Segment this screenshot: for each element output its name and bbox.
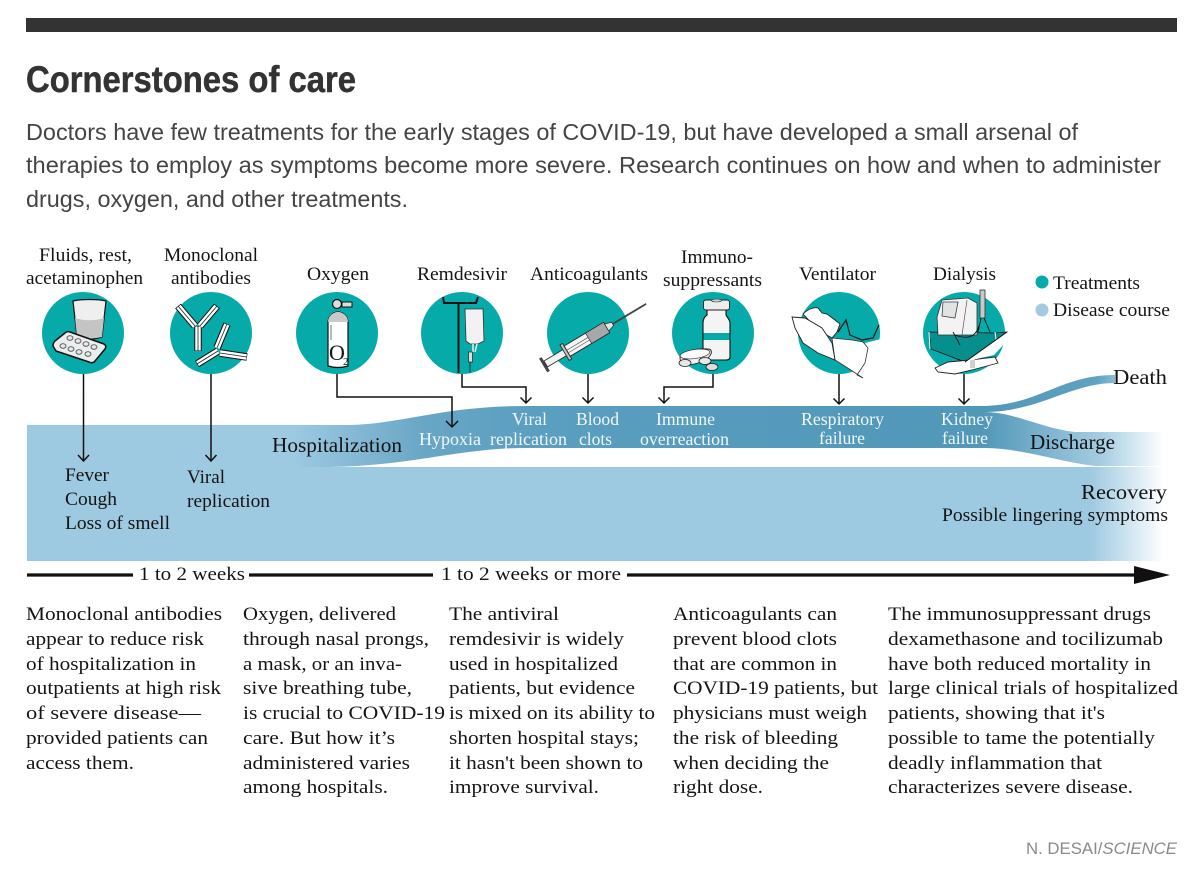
text column: anticoagulants: physicians must weigh bbox=[673, 703, 868, 724]
text column: anticoagulants: prevent blood clots bbox=[673, 629, 837, 650]
patient gown bbox=[832, 338, 868, 378]
band: hospitalization and discharge bbox=[27, 406, 1164, 467]
text column: oxygen: through nasal prongs, bbox=[243, 629, 429, 650]
outcome labels: Death bbox=[1113, 365, 1168, 389]
treatment labels: Oxygen bbox=[307, 265, 369, 285]
text column: monoclonal antibodies: provided patients can bbox=[26, 728, 209, 749]
icon circles row bbox=[42, 290, 1007, 382]
text column: anticoagulants bbox=[673, 604, 879, 798]
chart: disease course bands bbox=[27, 375, 1164, 561]
text column: oxygen: among hospitals. bbox=[243, 777, 388, 798]
text column: monoclonal antibodies: outpatients at high risk bbox=[26, 678, 222, 699]
treatment labels: acetaminophen bbox=[26, 269, 143, 289]
text column: monoclonal antibodies bbox=[26, 604, 222, 774]
treatment labels: Immuno- bbox=[681, 248, 753, 268]
text column: monoclonal antibodies: of hospitalization in bbox=[26, 654, 197, 675]
early symptoms labels: Loss of smell bbox=[65, 514, 170, 534]
icon: oxygen cylinder bbox=[296, 292, 378, 374]
text column: anticoagulants: right dose. bbox=[673, 777, 763, 798]
icon: immunosuppressant vial bbox=[672, 292, 754, 374]
outcome labels: Hospitalization bbox=[272, 433, 403, 457]
arrows from treatments to disease course bbox=[78, 374, 970, 461]
hospital complications labels bbox=[419, 409, 993, 449]
text column: oxygen: Oxygen, delivered bbox=[243, 604, 397, 625]
icon: dialysis machine bbox=[923, 290, 1007, 374]
icon: oxygen cylinder: 2 bbox=[343, 356, 348, 368]
top rule bbox=[26, 18, 1177, 32]
hospital complications labels: failure bbox=[942, 428, 988, 448]
band: death bbox=[983, 375, 1115, 412]
text column: immunosuppressants: possible to tame the potentially bbox=[888, 728, 1156, 749]
early symptoms labels: Cough bbox=[65, 490, 117, 510]
intro text: Doctors have few treatments for the early stages of COVID-19, but have developed a small arsenal of bbox=[26, 119, 1078, 145]
early symptoms labels: Fever bbox=[65, 466, 109, 486]
icon: ventilator patient bbox=[792, 292, 885, 382]
text column: remdesivir: shorten hospital stays; bbox=[449, 728, 639, 749]
hospital complications labels: replication bbox=[490, 429, 567, 449]
intro text bbox=[26, 119, 1161, 212]
timeline arrow bbox=[27, 564, 1170, 585]
text column: remdesivir: is mixed on its ability to bbox=[449, 703, 655, 724]
ventilator tube bbox=[838, 320, 879, 340]
hospital complications labels: clots bbox=[579, 429, 612, 449]
legend: treatments: Treatments bbox=[1053, 274, 1140, 294]
dialysis patient arm bbox=[935, 357, 998, 374]
text column: anticoagulants: COVID-19 patients, but bbox=[673, 678, 879, 699]
text column: anticoagulants: Anticoagulants can bbox=[673, 604, 838, 625]
treatment labels: Anticoagulants bbox=[530, 265, 648, 285]
text column: oxygen: is crucial to COVID-19 bbox=[243, 703, 445, 724]
text column: remdesivir: The antiviral bbox=[449, 604, 559, 625]
hospital complications labels: Immune bbox=[656, 409, 715, 429]
text column: oxygen bbox=[243, 604, 445, 798]
text column: oxygen: sive breathing tube, bbox=[243, 678, 412, 699]
text column: remdesivir: remdesivir is widely bbox=[449, 629, 625, 650]
text column: immunosuppressants: patients, showing that it's bbox=[888, 703, 1105, 724]
sheet cut-away bbox=[860, 339, 885, 382]
hospital complications labels: overreaction bbox=[640, 429, 729, 449]
icon: monoclonal antibodies bbox=[170, 292, 252, 374]
text column: immunosuppressants: large clinical trials of hospitalized bbox=[888, 678, 1179, 699]
icon: IV bag bbox=[421, 292, 503, 374]
credit: N. DESAI/SCIENCE bbox=[1026, 840, 1178, 858]
intro text: drugs, oxygen, and other treatments. bbox=[26, 186, 408, 212]
outcome labels: Discharge bbox=[1030, 430, 1115, 454]
icon: oxygen cylinder: O bbox=[329, 340, 345, 365]
text column: immunosuppressants: characterizes severe disease. bbox=[888, 777, 1133, 798]
text column: remdesivir: used in hospitalized bbox=[449, 654, 619, 675]
legend bbox=[1036, 274, 1170, 321]
text column: anticoagulants: that are common in bbox=[673, 654, 838, 675]
legend: disease course: Disease course bbox=[1053, 301, 1170, 321]
early symptoms labels: replication bbox=[187, 492, 270, 512]
hospital complications labels: Kidney bbox=[941, 409, 993, 429]
text column: oxygen: a mask, or an inva- bbox=[243, 654, 402, 675]
treatment labels: Fluids, rest, bbox=[39, 246, 132, 266]
text column: anticoagulants: when deciding the bbox=[673, 753, 829, 774]
early symptoms labels: Viral bbox=[187, 468, 225, 488]
icon: fluids and pills bbox=[42, 292, 124, 374]
text column: oxygen: care. But how it’s bbox=[243, 728, 395, 749]
text column: immunosuppressants bbox=[888, 604, 1179, 798]
text column: monoclonal antibodies: of severe disease— bbox=[26, 703, 202, 724]
outcome labels bbox=[272, 365, 1168, 526]
treatment labels: suppressants bbox=[663, 271, 762, 291]
treatment labels bbox=[26, 246, 996, 291]
hospital complications labels: Hypoxia bbox=[419, 429, 481, 449]
treatment labels: Monoclonal bbox=[164, 246, 258, 266]
text column: remdesivir: patients, but evidence bbox=[449, 678, 635, 699]
outcome labels: Possible lingering symptoms bbox=[942, 506, 1168, 526]
treatment labels: antibodies bbox=[171, 269, 251, 289]
early symptoms labels bbox=[65, 466, 270, 534]
timeline arrow: 1 to 2 weeks or more bbox=[441, 564, 621, 585]
text column: immunosuppressants: dexamethasone and tocilizumab bbox=[888, 629, 1163, 650]
hospital complications labels: failure bbox=[819, 428, 865, 448]
text column: immunosuppressants: The immunosuppressant drugs bbox=[888, 604, 1151, 625]
text column: immunosuppressants: have both reduced mortality in bbox=[888, 654, 1152, 675]
text column: immunosuppressants: deadly inflammation that bbox=[888, 753, 1103, 774]
text column: monoclonal antibodies: appear to reduce risk bbox=[26, 629, 205, 650]
text column: remdesivir bbox=[449, 604, 655, 798]
text column: anticoagulants: the risk of bleeding bbox=[673, 728, 839, 749]
icon: syringe bbox=[539, 292, 651, 374]
intro text: therapies to employ as symptoms become more severe. Research continues on how and when to administer bbox=[26, 152, 1161, 178]
pillow bbox=[792, 317, 835, 360]
band: recovery bbox=[27, 467, 1164, 561]
hospital complications labels: Blood bbox=[576, 409, 619, 429]
hospital complications labels: Respiratory bbox=[801, 409, 884, 429]
text column: remdesivir: it hasn't been shown to bbox=[449, 753, 643, 774]
patient head bbox=[803, 308, 840, 338]
treatment labels: Ventilator bbox=[799, 265, 876, 285]
hospital complications labels: Viral bbox=[512, 409, 547, 429]
text column: monoclonal antibodies: access them. bbox=[26, 753, 134, 774]
treatment labels: Remdesivir bbox=[417, 265, 507, 285]
timeline arrow: 1 to 2 weeks bbox=[139, 564, 245, 585]
outcome labels: Recovery bbox=[1081, 480, 1168, 504]
text column: monoclonal antibodies: Monoclonal antibodies bbox=[26, 604, 222, 625]
title: Cornerstones of care bbox=[26, 59, 356, 100]
treatment labels: Dialysis bbox=[933, 265, 996, 285]
text column: remdesivir: improve survival. bbox=[449, 777, 599, 798]
text column: oxygen: administered varies bbox=[243, 753, 410, 774]
